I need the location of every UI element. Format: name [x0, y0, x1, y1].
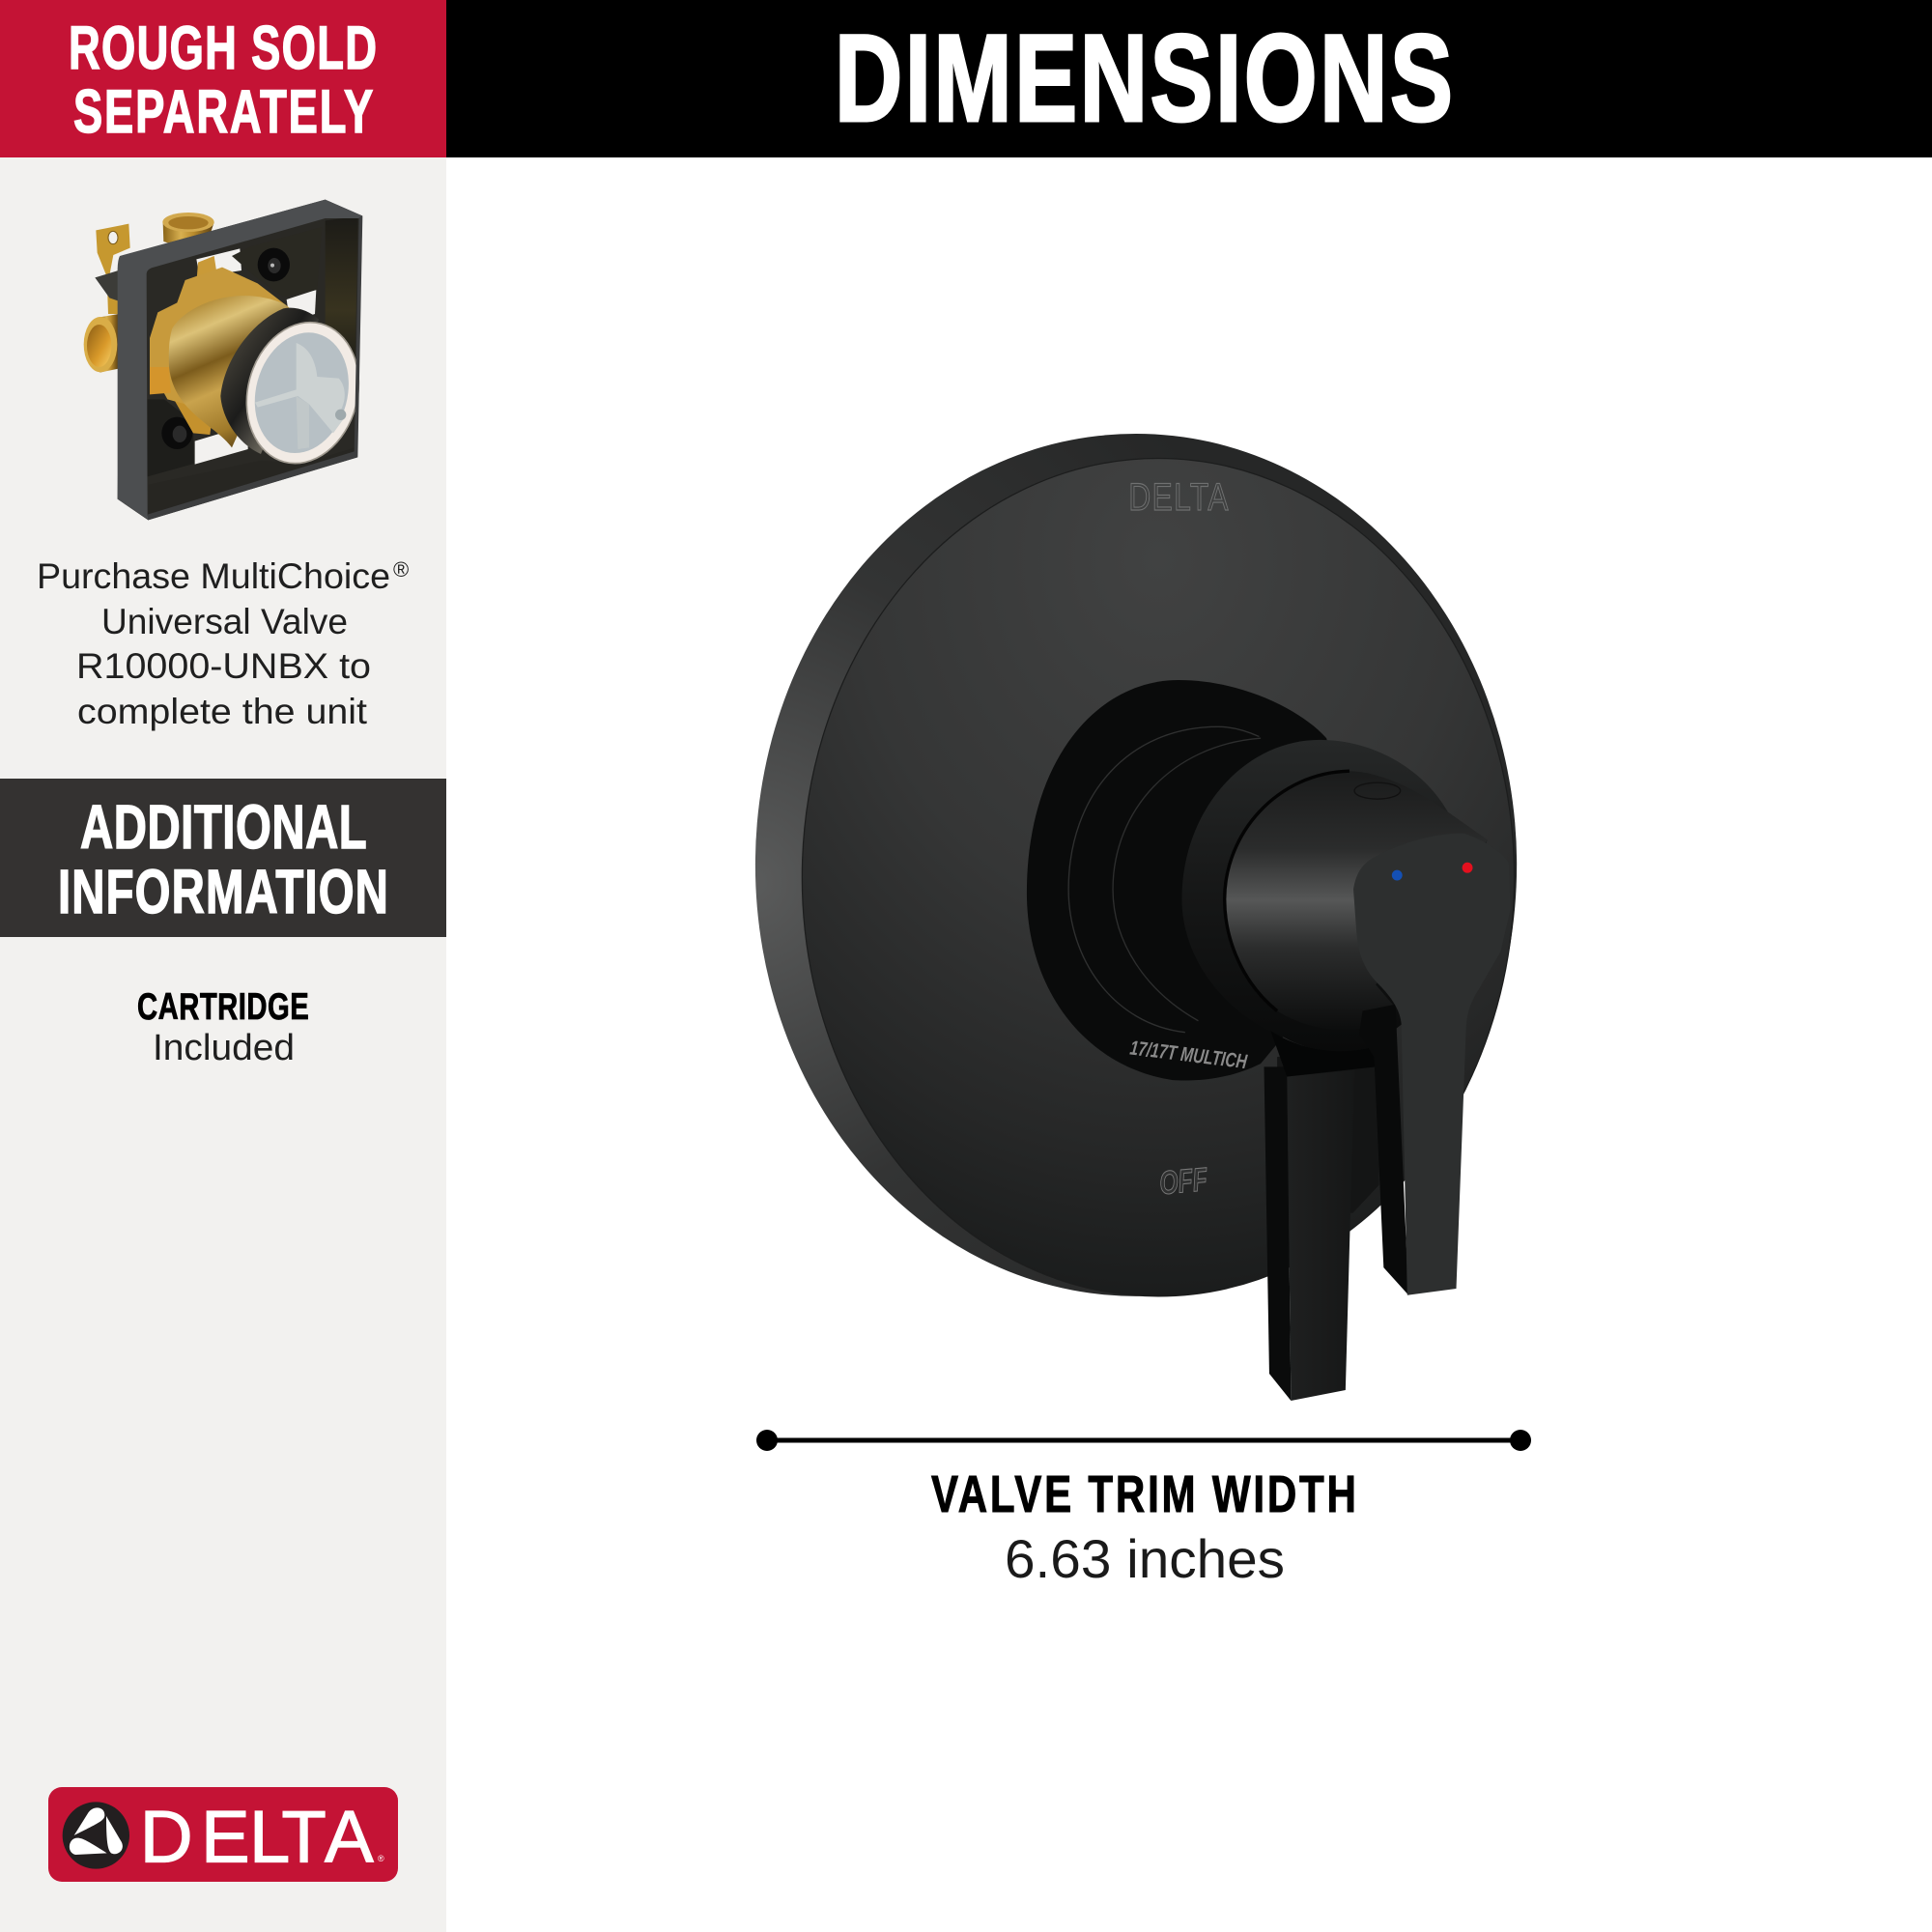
- interior bottom wall: [148, 447, 356, 519]
- upper mount with screw: [232, 227, 322, 297]
- pin hole: [1354, 782, 1401, 799]
- rear bracket: [95, 270, 119, 301]
- lower mount with screw: [148, 399, 194, 476]
- off marking: OFF: [1158, 1161, 1209, 1202]
- engraved brand: DELTA: [1128, 476, 1229, 519]
- trim plate face: [802, 458, 1515, 1296]
- cartridge info: Included: [153, 1028, 295, 1068]
- rear lever side: [1359, 1005, 1408, 1295]
- banner: rough sold separately: ROUGH SOLD: [69, 14, 377, 82]
- banner: rough sold separately: SEPARATELY: [73, 77, 373, 146]
- rear casting: [150, 268, 289, 418]
- frame right lip: [148, 215, 362, 520]
- banner: dimensions title: [446, 0, 1932, 157]
- cartridge info: CARTRIDGE: [137, 986, 309, 1028]
- rough valve purchase note: [37, 556, 409, 731]
- right inner wall: [326, 216, 358, 374]
- valve handle assembly: [1027, 680, 1511, 1401]
- delta logo: [48, 1787, 398, 1882]
- logo mark: [63, 1802, 129, 1869]
- window openings: [195, 248, 316, 465]
- dark sleeve: [220, 308, 319, 454]
- frame interior: [118, 200, 362, 520]
- left pipe: [99, 314, 119, 373]
- top pipe: [163, 222, 214, 244]
- collar underside: [1270, 1031, 1376, 1077]
- chrome ring: [231, 310, 374, 476]
- handle collar: [1181, 740, 1488, 1052]
- upper neck: [196, 256, 217, 283]
- rough valve purchase note: R10000-UNBX to: [76, 646, 371, 686]
- rough valve purchase note: ®: [393, 557, 409, 582]
- rough valve purchase note: Universal Valve: [101, 602, 348, 641]
- central recess: [1027, 680, 1376, 1080]
- banner: additional information: ADDITIONAL: [80, 792, 367, 862]
- width dimension line: [756, 1430, 1531, 1451]
- delta logo: DELTA: [140, 1797, 374, 1878]
- plate shadow behind levers: [1277, 1044, 1379, 1213]
- banner: additional information: [0, 779, 446, 937]
- hot indicator: [1463, 863, 1472, 873]
- banner: rough sold separately: [0, 0, 446, 157]
- cartridge info: [137, 986, 309, 1068]
- rough valve purchase note: complete the unit: [77, 692, 368, 731]
- dimension label: [931, 1465, 1356, 1589]
- dimension label: VALVE TRIM WIDTH: [931, 1465, 1356, 1523]
- brass cylinder: [169, 296, 293, 447]
- escutcheon ring outer: [1068, 726, 1259, 1033]
- body shadow line: [1225, 771, 1350, 1011]
- delta logo: ®: [378, 1854, 384, 1863]
- banner: dimensions title: DIMENSIONS: [835, 10, 1453, 148]
- lower threaded stub: [174, 399, 213, 435]
- handle body: [1225, 771, 1488, 1030]
- front lever: [1264, 1066, 1354, 1401]
- cold indicator: [1392, 870, 1403, 880]
- rough valve product image: [84, 200, 374, 520]
- valve trim plate: [755, 434, 1517, 1296]
- escutcheon ring inner: [1113, 738, 1261, 1021]
- frame front faces: [118, 200, 362, 520]
- dimension label: 6.63 inches: [1005, 1528, 1285, 1589]
- banner: additional information: INFORMATION: [58, 857, 388, 926]
- trim plate outer rim: [755, 434, 1517, 1296]
- rough valve purchase note: Purchase MultiChoice: [37, 556, 390, 596]
- dust cap: [242, 322, 361, 464]
- sidebar panel: [0, 0, 446, 1932]
- handle cap and rear lever: [1353, 834, 1511, 1295]
- model marking: 17/17T MULTICH: [1128, 1037, 1249, 1073]
- mounting tab: [96, 224, 130, 314]
